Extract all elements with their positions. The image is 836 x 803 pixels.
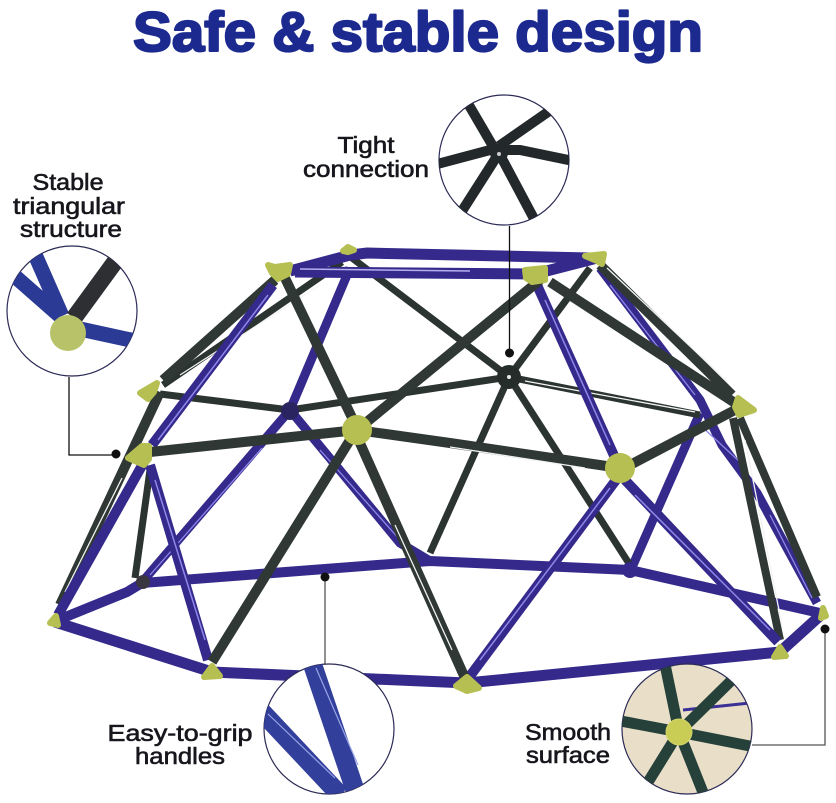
inset: smooth connector on sand — [621, 663, 753, 795]
inset: tube close-up — [262, 660, 394, 795]
label: handles — [135, 743, 225, 769]
back dark bars — [135, 258, 817, 640]
inset: hub connection — [438, 94, 570, 226]
callout: smooth surface — [525, 624, 830, 803]
inset: triangular joint — [7, 246, 140, 376]
label: Easy-to-grip — [108, 720, 252, 746]
connector nodes — [50, 247, 826, 691]
label — [303, 132, 429, 182]
front base ring — [55, 613, 823, 683]
leader line — [320, 572, 330, 664]
front bars — [58, 265, 778, 678]
label: Stable — [32, 169, 104, 195]
callout: stable triangular structure — [7, 169, 140, 458]
label: surface — [526, 742, 610, 768]
leader line — [752, 624, 830, 745]
label: structure — [20, 216, 122, 242]
back base ring and back blue bars — [58, 268, 820, 620]
label — [13, 169, 125, 242]
label: triangular — [13, 193, 125, 219]
label: Smooth — [525, 719, 611, 745]
title: Safe & stable design — [133, 0, 703, 63]
label — [525, 719, 611, 768]
climbing dome structure — [50, 247, 826, 691]
label — [108, 720, 252, 769]
callout: tight connection — [303, 95, 578, 358]
leader line — [69, 377, 120, 458]
label: Tight — [338, 132, 395, 158]
label: connection — [303, 156, 429, 182]
leader line — [505, 226, 514, 358]
top ring — [290, 253, 597, 274]
callout: easy-to-grip handles — [108, 572, 394, 795]
